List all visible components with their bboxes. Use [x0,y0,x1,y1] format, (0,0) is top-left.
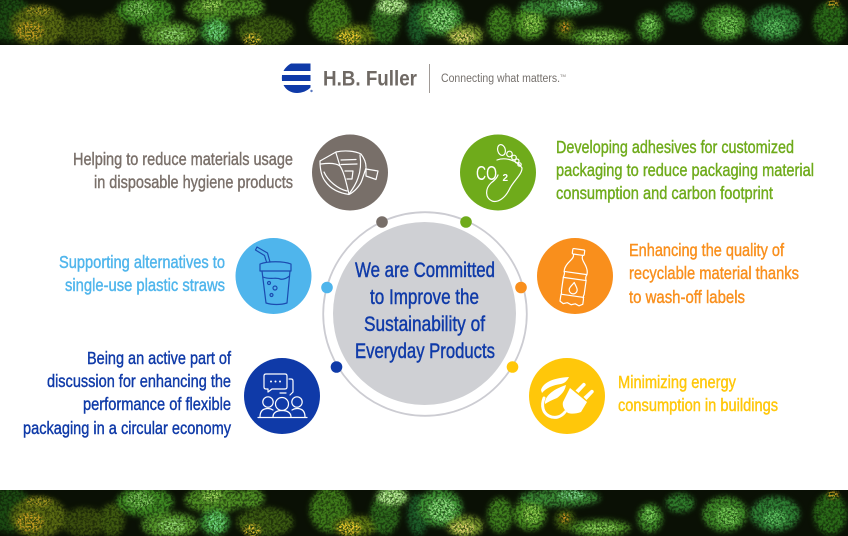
text: wash-off labels [629,240,799,307]
text: plastic straws [59,252,225,295]
text: energy consumption [618,372,778,415]
photo banner: top foliage [0,0,848,46]
text: plastic straws: Supporting alternatives to [59,252,225,272]
icon: leaf and plug [529,358,605,434]
text: flexible packaging: packaging in a circular economy [23,418,231,438]
text: energy consumption: consumption in buildings [618,395,778,415]
center heading: We are Committed [355,259,495,282]
center heading: to Improve the [370,286,479,309]
text: wash-off labels: Enhancing the quality of [629,240,784,260]
center heading: Everyday Products [355,340,495,363]
center: ring and disc [321,212,527,416]
tagline: Connecting what matters. [441,73,560,85]
text: packaging adhesives [556,137,814,203]
icon: CO2 footprint: 2 [502,173,508,184]
text: flexible packaging: performance of flexible [83,394,231,414]
text: packaging adhesives: Developing adhesives for customized [556,137,794,157]
logo mark [282,64,313,93]
company name: H.B. Fuller [323,68,417,90]
text: flexible packaging: Being an active part of [87,348,231,368]
icon: CO2 footprint [460,134,536,210]
center heading: Sustainability of [364,313,485,336]
icon: discussion group [244,358,320,434]
logo: H.B. Fuller: TM [560,73,566,78]
text: energy consumption: Minimizing energy [618,372,736,392]
icon: CO2 footprint: CO [476,163,497,185]
text: plastic straws: single-use plastic straws [65,275,225,295]
icon: diaper [312,134,388,210]
text: wash-off labels: recyclable material thanks [629,263,799,283]
icon: plastic bottle [537,238,613,314]
text: hygiene products: in disposable hygiene products [94,172,293,192]
icon: cup with straw [236,238,312,314]
text: packaging adhesives: consumption and carbon footprint [556,183,773,203]
logo: H.B. Fuller [282,64,566,93]
text: flexible packaging: discussion for enhancing the [47,371,231,391]
center heading [355,259,495,363]
photo banner: bottom foliage [0,488,848,536]
text: hygiene products [73,149,293,192]
text: flexible packaging [23,348,231,438]
text: wash-off labels: to wash-off labels [629,287,745,307]
text: hygiene products: Helping to reduce materials usage [73,149,293,169]
connector dots [321,216,527,373]
